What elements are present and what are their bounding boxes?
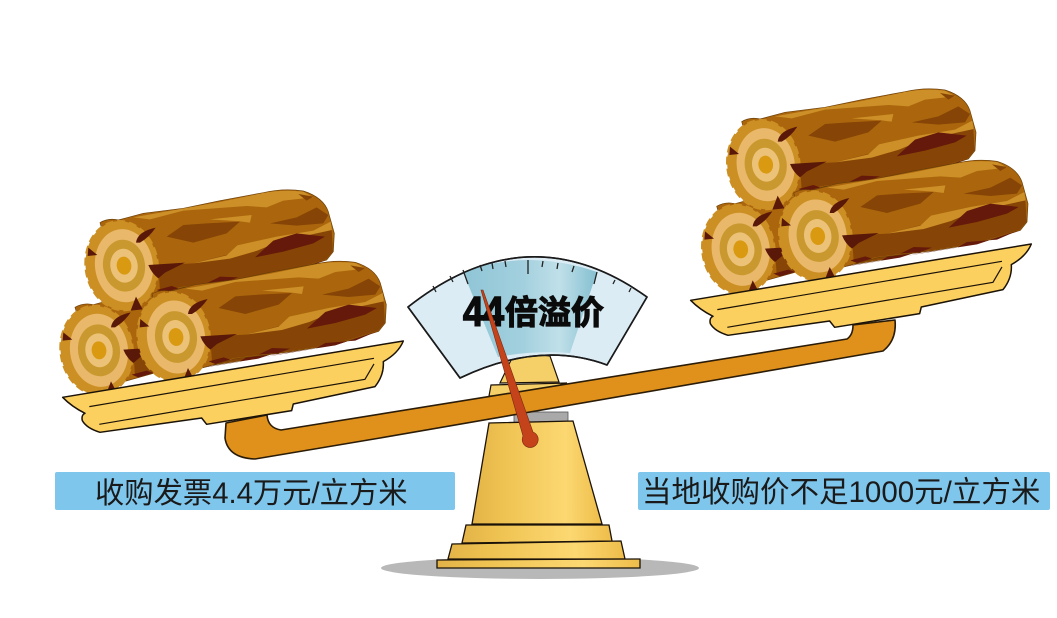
shadow under the scale <box>381 557 699 579</box>
left tray plate <box>63 341 403 432</box>
right label: 当地收购价不足1000元/立方米 <box>642 476 1040 509</box>
dial gauge <box>408 257 647 378</box>
left logs <box>55 190 386 400</box>
dial heading: 44倍溢价 <box>463 290 604 335</box>
dial heading: 44倍溢价: 44 <box>463 290 504 335</box>
right logs <box>697 89 1028 299</box>
balance beam <box>225 320 895 459</box>
left label: 收购发票4.4万元/立方米 <box>95 477 408 510</box>
dial heading: 44倍溢价: 倍溢价 <box>505 294 604 331</box>
scale stand neck <box>489 355 567 396</box>
left label <box>55 472 455 510</box>
gray pivot block <box>514 412 568 424</box>
pointer needle <box>481 290 538 447</box>
dial centre highlight <box>463 260 597 357</box>
scale base <box>437 421 640 568</box>
right tray plate <box>691 244 1031 335</box>
